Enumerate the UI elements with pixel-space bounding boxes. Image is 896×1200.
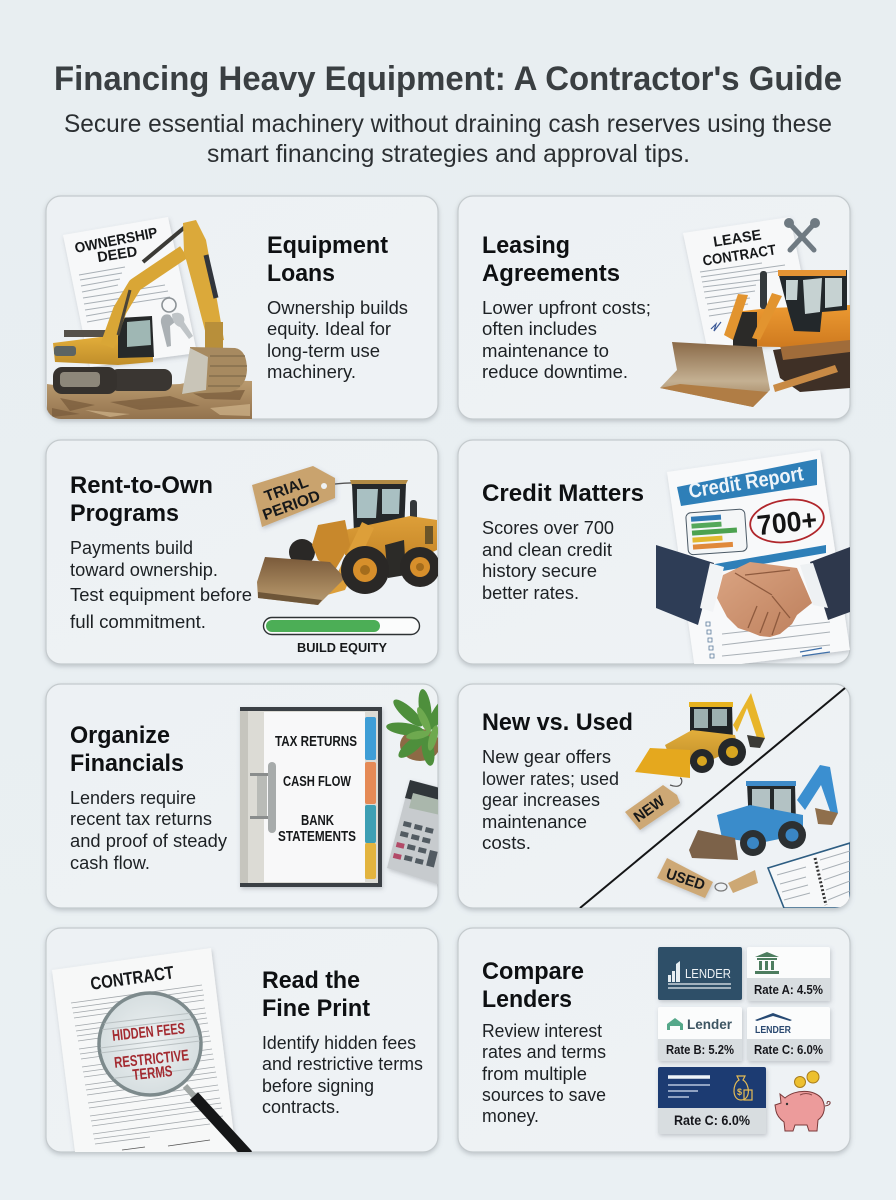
heading: Read the xyxy=(262,967,360,994)
body text: cash flow. xyxy=(70,852,150,873)
illustration: bulldozer with lease contract: LEASE xyxy=(712,227,763,251)
illustration: contract and magnifying glass xyxy=(52,948,248,1160)
lender tile: wide navy xyxy=(658,1067,766,1134)
lender tile: rate A xyxy=(747,947,830,1001)
body text xyxy=(482,297,651,382)
body text: Lenders require xyxy=(70,787,196,808)
body text: from multiple xyxy=(482,1063,587,1084)
title: Financing Heavy Equipment: A Contractor's Guide xyxy=(54,60,842,98)
body text xyxy=(267,297,408,382)
subtitle: Secure essential machinery without draining cash reserves using these xyxy=(64,110,832,138)
illustration: wheel loader with trial period tag: PERIOD xyxy=(260,488,323,524)
heading: Credit Matters xyxy=(482,480,644,507)
body text xyxy=(482,517,614,603)
illustration: contract and magnifying glass: HIDDEN FEES xyxy=(111,1020,186,1045)
heading: Equipment xyxy=(267,232,388,259)
lender tile: wide navy: Rate C: 6.0% xyxy=(674,1112,750,1128)
card background xyxy=(458,928,850,1152)
card background xyxy=(458,440,850,664)
illustration: contract and magnifying glass: TERMS xyxy=(132,1063,173,1084)
body text: better rates. xyxy=(482,582,579,603)
illustration: new and used backhoes xyxy=(580,688,850,908)
body text xyxy=(482,746,619,853)
body text: and restrictive terms xyxy=(262,1053,423,1074)
heading: Leasing xyxy=(482,232,570,259)
lender tile: rate B: Lender xyxy=(687,1017,733,1032)
illustration: binder, plant and calculator: TAX RETURNS xyxy=(275,734,357,750)
body text: reduce downtime. xyxy=(482,361,628,382)
body text: Test equipment before xyxy=(70,584,252,605)
heading: Organize xyxy=(70,722,170,749)
body text: Review interest xyxy=(482,1020,602,1041)
body text: maintenance xyxy=(482,811,587,832)
panel: leasing agreements xyxy=(458,196,850,419)
body text: and proof of steady xyxy=(70,830,228,851)
body text: gear increases xyxy=(482,789,600,810)
illustration: binder, plant and calculator xyxy=(240,688,452,887)
body text: long-term use xyxy=(267,340,380,361)
body text: maintenance to xyxy=(482,340,609,361)
card background xyxy=(458,684,850,908)
subtitle xyxy=(64,110,832,168)
panel: read the fine print xyxy=(46,928,438,1160)
lender tile: rate C: LENDER xyxy=(755,1025,792,1036)
lender tile: rate B xyxy=(658,1007,742,1061)
body text: recent tax returns xyxy=(70,808,212,829)
heading: Fine Print xyxy=(262,995,370,1022)
body text: Scores over 700 xyxy=(482,517,614,538)
illustration: excavator with ownership deed: OWNERSHIP xyxy=(73,225,159,257)
heading: Agreements xyxy=(482,260,620,287)
body text: and clean credit xyxy=(482,539,612,560)
card background xyxy=(46,684,438,908)
card background xyxy=(46,928,438,1152)
lender tile: wide navy: $ xyxy=(737,1087,742,1097)
body text: contracts. xyxy=(262,1096,340,1117)
body text: New gear offers xyxy=(482,746,611,767)
heading: Lenders xyxy=(482,986,572,1013)
heading: Compare xyxy=(482,958,584,985)
heading xyxy=(482,958,584,1013)
lender tile: dark: LENDER xyxy=(685,967,731,981)
heading xyxy=(267,232,388,287)
heading: Loans xyxy=(267,260,335,287)
body text: Ownership builds xyxy=(267,297,408,318)
heading xyxy=(262,967,370,1022)
card background xyxy=(458,196,850,419)
illustration: credit report and handshake: Credit Report xyxy=(687,462,805,503)
illustration: binder, plant and calculator: STATEMENTS xyxy=(278,829,356,845)
heading: Programs xyxy=(70,500,179,527)
body text: Identify hidden fees xyxy=(262,1032,416,1053)
lender tile: rate B: Rate B: 5.2% xyxy=(666,1043,734,1057)
illustration: new and used backhoes: NEW xyxy=(631,792,669,826)
illustration: credit report and handshake: 700+ xyxy=(756,504,818,541)
illustration: wheel loader with trial period tag: TRIAL xyxy=(262,474,311,506)
heading: New vs. Used xyxy=(482,709,633,736)
body text: history secure xyxy=(482,560,597,581)
body text: money. xyxy=(482,1105,539,1126)
body text: before signing xyxy=(262,1075,374,1096)
body text xyxy=(262,1032,423,1117)
body text xyxy=(482,1020,606,1126)
illustration: new and used backhoes: USED xyxy=(664,865,707,894)
body text: equity. Ideal for xyxy=(267,318,391,339)
lender tile: rate A: Rate A: 4.5% xyxy=(754,983,823,997)
illustration: bulldozer with lease contract xyxy=(660,217,850,407)
progress bar: build equity xyxy=(264,618,420,655)
illustration: contract and magnifying glass: CONTRACT xyxy=(89,962,175,994)
illustration: wheel loader with trial period tag xyxy=(252,466,440,605)
heading: Financials xyxy=(70,750,184,777)
card background xyxy=(46,440,438,664)
illustration: excavator with ownership deed xyxy=(47,217,252,419)
lender tile: dark xyxy=(658,947,742,1000)
body text: toward ownership. xyxy=(70,559,218,580)
card background xyxy=(46,196,438,419)
illustration: excavator with ownership deed: DEED xyxy=(96,244,139,266)
illustration: contract and magnifying glass: RESTRICTIVE xyxy=(113,1047,190,1072)
body text xyxy=(70,787,228,873)
body text: Payments build xyxy=(70,537,193,558)
heading xyxy=(482,232,620,287)
body text: often includes xyxy=(482,318,597,339)
heading xyxy=(70,472,213,527)
heading xyxy=(70,722,184,777)
body text: full commitment. xyxy=(70,611,206,632)
body text: sources to save xyxy=(482,1084,606,1105)
panel: compare lenders xyxy=(458,928,850,1152)
body text: lower rates; used xyxy=(482,768,619,789)
illustration: binder, plant and calculator: CASH FLOW xyxy=(283,774,351,790)
panel: credit matters xyxy=(458,440,850,670)
body text: costs. xyxy=(482,832,531,853)
panel: equipment loans xyxy=(46,196,438,419)
body text: rates and terms xyxy=(482,1041,606,1062)
illustration: bulldozer with lease contract: CONTRACT xyxy=(702,242,777,270)
subtitle: smart financing strategies and approval tips. xyxy=(207,140,690,168)
progress bar: build equity: BUILD EQUITY xyxy=(297,640,387,655)
icon: piggy bank with coins xyxy=(775,1071,830,1131)
lender tile: rate C: Rate C: 6.0% xyxy=(754,1043,823,1057)
illustration: binder, plant and calculator: BANK xyxy=(301,813,334,829)
lender tile: rate C xyxy=(747,1007,830,1061)
body text: machinery. xyxy=(267,361,356,382)
body text: Lower upfront costs; xyxy=(482,297,651,318)
heading: Rent-to-Own xyxy=(70,472,213,499)
panel: rent-to-own programs xyxy=(46,440,440,664)
panel: new vs. used xyxy=(458,684,850,908)
panel: organize financials xyxy=(46,684,452,908)
illustration: credit report and handshake xyxy=(656,450,850,670)
body text xyxy=(70,537,252,632)
